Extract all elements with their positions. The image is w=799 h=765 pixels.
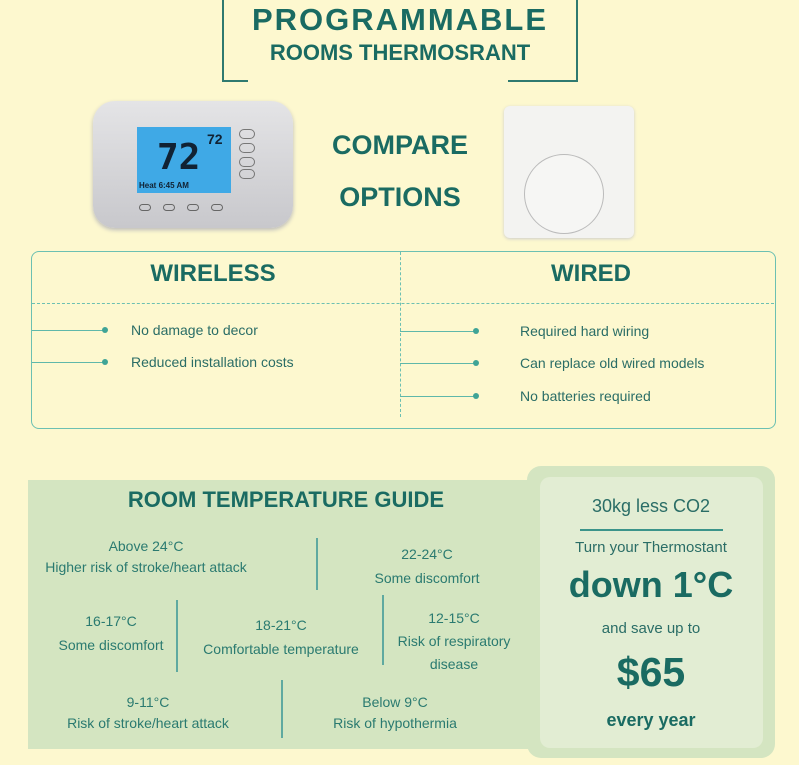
item: below 9: Below 9°C (362, 694, 428, 710)
item: 9-11 (67, 694, 229, 731)
heading: compare options: COMPARE (332, 130, 468, 160)
item: 16-17 (58, 613, 164, 653)
heading: ROOM TEMPERATURE GUIDE (128, 487, 444, 512)
item: 16-17: Some discomfort (58, 637, 164, 653)
heading: compare options (332, 130, 468, 212)
title frame (222, 0, 578, 82)
list: wireless (32, 322, 294, 370)
item: below 9 (333, 694, 457, 731)
icon: digital thermostat: 72 (207, 131, 223, 147)
item: 22-24: 22-24°C (401, 546, 453, 562)
title frame: ROOMS THERMOSRANT (270, 40, 530, 65)
list: wired: Can replace old wired models (520, 355, 704, 371)
panel: savings callout: every year (606, 710, 696, 730)
panel: savings callout: $65 (617, 649, 685, 695)
item: above 24: Higher risk of stroke/heart attack (45, 559, 247, 575)
panel: wireless vs wired (31, 251, 776, 429)
item: above 24 (45, 538, 247, 575)
panel: savings callout: down 1°C (569, 564, 733, 605)
list: wireless: Reduced installation costs (131, 354, 294, 370)
list: wireless: No damage to decor (131, 322, 258, 338)
item: above 24: Above 24°C (109, 538, 183, 554)
heading: wired: WIRED (551, 260, 631, 287)
icon: dial thermostat (504, 106, 634, 238)
item: 9-11: 9-11°C (127, 694, 169, 710)
list: wired: Required hard wiring (520, 323, 649, 339)
list: wired: No batteries required (520, 388, 651, 404)
icon: digital thermostat: Heat 6:45 AM (139, 181, 189, 190)
item: 12-15: disease (430, 656, 478, 672)
item: below 9: Risk of hypothermia (333, 715, 457, 731)
item: 12-15: Risk of respiratory (398, 633, 510, 649)
item: 18-21 (203, 617, 359, 657)
heading: compare options: OPTIONS (339, 182, 461, 212)
heading: wireless: WIRELESS (150, 260, 276, 287)
item: 12-15: 12-15°C (428, 610, 480, 626)
item: 18-21: 18-21°C (255, 617, 307, 633)
icon: digital thermostat (93, 101, 293, 228)
list: wired (400, 323, 704, 404)
panel: savings callout: and save up to (602, 620, 700, 637)
item: 18-21: Comfortable temperature (203, 641, 359, 657)
item: 12-15 (398, 610, 510, 672)
panel: savings callout: Turn your Thermostant (575, 539, 727, 556)
title text: PROGRAMMABLE (252, 2, 548, 37)
item: 9-11: Risk of stroke/heart attack (67, 715, 229, 731)
icon: digital thermostat: 72 (157, 137, 200, 178)
item: 16-17: 16-17°C (85, 613, 137, 629)
panel: savings callout: 30kg less CO2 (592, 496, 710, 516)
panel: savings callout (527, 466, 775, 758)
item: 22-24 (374, 546, 480, 586)
panel: room temperature guide (28, 480, 538, 749)
item: 22-24: Some discomfort (374, 570, 480, 586)
